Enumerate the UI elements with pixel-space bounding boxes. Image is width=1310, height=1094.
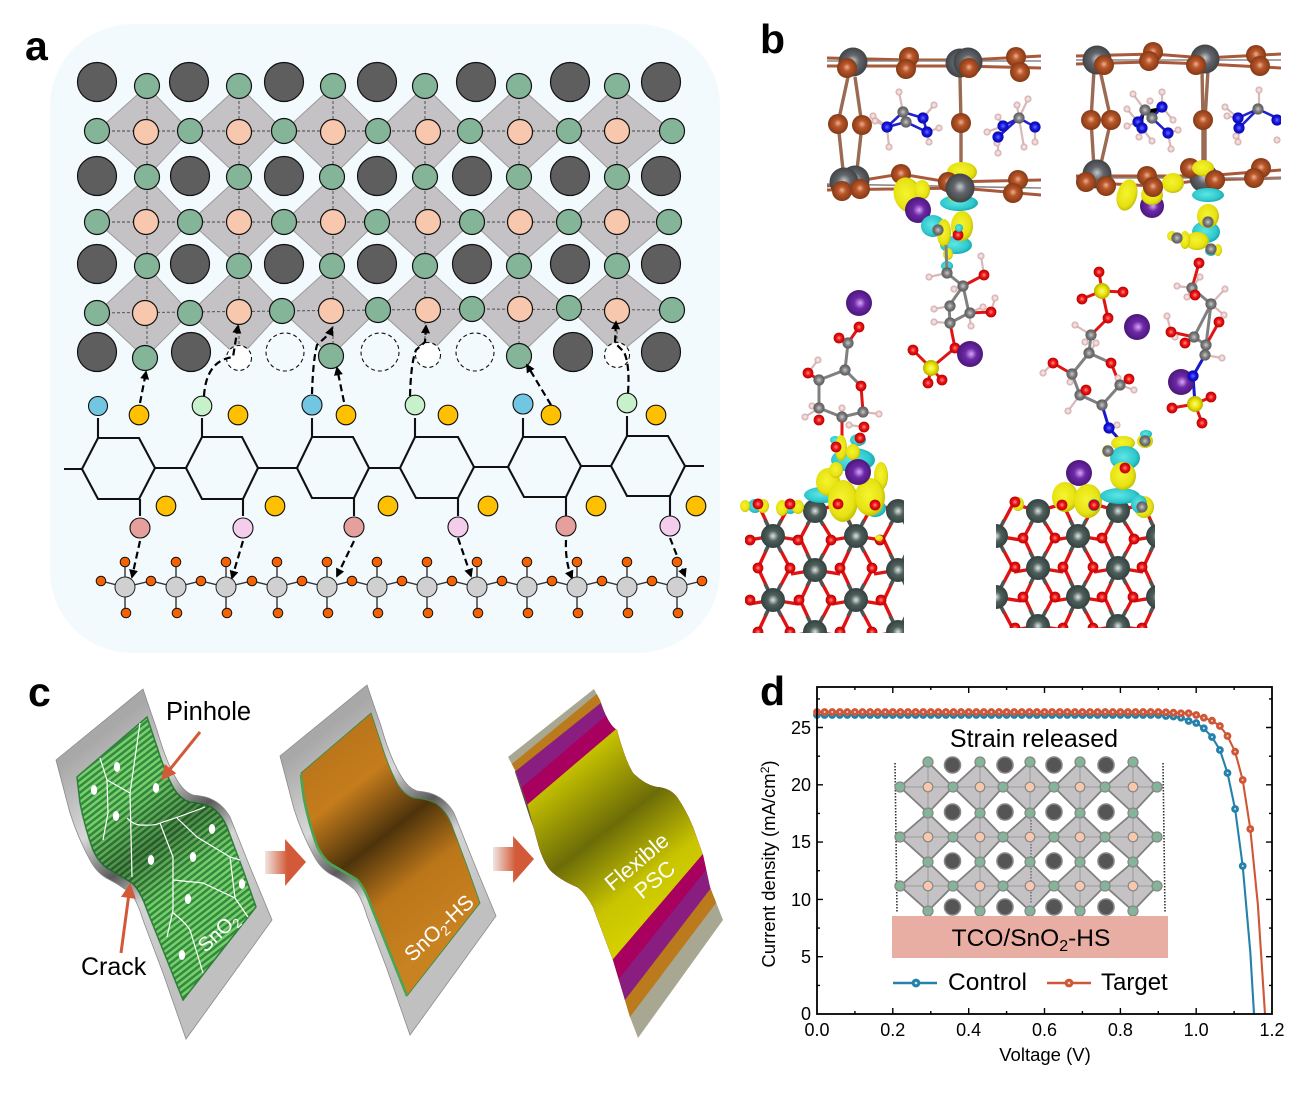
TCO/SnO2-HS layer	[892, 916, 1168, 958]
inset octahedra	[900, 762, 1157, 911]
film green edge	[301, 775, 407, 996]
crack callout	[81, 886, 147, 981]
hanging molecule in left model	[908, 245, 998, 388]
cracks	[100, 723, 248, 973]
plot frame and ticks	[817, 687, 1272, 1014]
x tick labels: 0.6	[1032, 1020, 1057, 1040]
right charge density, lower interface	[1010, 430, 1154, 518]
Target J-V curve	[817, 712, 1258, 905]
right SnO2 slab	[996, 496, 1155, 628]
block arrow 2	[493, 836, 534, 883]
left perovskite slab	[827, 47, 1041, 203]
left SnO2 slab	[745, 498, 904, 633]
ribbon 2: SnO2-HS on substrate	[280, 685, 496, 1035]
film shading	[77, 717, 256, 1000]
x tick labels: 1.0	[1184, 1020, 1209, 1040]
panel b: DFT charge density	[740, 16, 1283, 664]
dashed arrows: molecule to perovskite and SnO2	[132, 322, 685, 578]
TCO/SnO2-HS layer: TCO/SnO	[952, 925, 1059, 952]
legend: Target	[1047, 969, 1168, 996]
A-site and halide vacancies	[226, 333, 630, 371]
inset dotted guides	[895, 763, 1165, 912]
panel letter c: c	[28, 669, 51, 715]
x axis title: Voltage (V)	[999, 1044, 1091, 1065]
SnO2 chain tin atoms	[115, 577, 687, 597]
panel a: perovskite / SnO2 interface schematic	[25, 23, 720, 653]
substrate sheet	[280, 685, 496, 1035]
y axis title: Current density (mA/cm	[758, 773, 779, 968]
SnO2 label: SnO	[194, 914, 238, 957]
large dark A-site cations	[78, 62, 680, 372]
pinhole callout: Pinhole	[166, 698, 251, 726]
substrate sheet	[56, 689, 272, 1039]
x tick labels: 0.0	[804, 1020, 830, 1040]
SnO2-HS label: -HS	[436, 891, 479, 932]
Flexible label: Flexible	[600, 828, 674, 896]
SnO2 label: 2	[229, 915, 245, 931]
crack callout: Crack	[81, 953, 147, 981]
y tick labels: 20	[791, 775, 811, 795]
panel letter d: d	[760, 668, 785, 714]
Control J-V curve	[817, 715, 1250, 952]
y tick labels: 25	[791, 718, 811, 738]
right adsorbed molecule	[1040, 267, 1150, 438]
y axis title: 2	[758, 766, 772, 773]
x tick labels: 0.8	[1108, 1020, 1133, 1040]
orange B-site atoms	[132, 118, 630, 326]
SnO2-HS label: 2	[437, 922, 454, 939]
striped SnO2 film	[77, 717, 256, 1000]
SnO2 chain oxygen atoms	[96, 557, 707, 618]
ribbon 3: flexible PSC stack	[508, 689, 723, 1038]
inset dark cations	[944, 757, 1114, 915]
bottom functional groups	[130, 516, 680, 538]
inset center dotted line	[1030, 820, 1032, 903]
x tick labels: 0.2	[880, 1020, 905, 1040]
panel letter a: a	[25, 23, 49, 69]
layered stack	[508, 689, 723, 1038]
y tick labels: 15	[791, 832, 811, 852]
yellow counter cations	[129, 405, 706, 516]
y tick labels: 0	[801, 1004, 811, 1024]
left charge density, upper interface	[889, 162, 978, 271]
inset green atoms	[895, 757, 1162, 916]
green halide atoms	[84, 74, 684, 370]
x tick labels	[804, 1020, 1285, 1040]
y axis title: )	[758, 760, 779, 767]
perovskite octahedra	[97, 86, 672, 358]
SnO2-HS film	[301, 713, 480, 996]
hanging molecule in right model	[1164, 258, 1228, 428]
hexagon polymer chain	[64, 416, 704, 516]
inset title: Strain released	[950, 725, 1118, 753]
underside edge	[515, 770, 634, 1025]
panel a background	[50, 24, 720, 653]
SnO2 chain bonds	[101, 562, 702, 612]
y tick labels: 5	[801, 947, 811, 967]
pinholes	[91, 762, 245, 960]
top functional groups	[88, 393, 637, 416]
left adsorbed molecule	[802, 290, 882, 440]
y tick labels	[791, 718, 811, 1024]
panel d: J-V curves	[758, 668, 1285, 1065]
left charge density, lower interface	[740, 433, 888, 541]
inset: strain released lattice	[892, 725, 1168, 958]
block arrow 1	[265, 839, 306, 886]
Control curve end segment	[1250, 952, 1254, 1014]
legend: Control	[893, 969, 1027, 996]
right charge density, upper interface	[1113, 160, 1225, 256]
legend: Target: Target	[1101, 969, 1168, 996]
pinhole callout	[163, 698, 251, 778]
x tick labels: 1.2	[1259, 1020, 1285, 1040]
inset orange atoms	[923, 782, 1138, 891]
right perovskite slab	[1076, 42, 1283, 197]
ribbon 1: SnO2 on substrate	[56, 689, 272, 1039]
panel c: flexible device schematic	[30, 684, 723, 1040]
y tick labels: 10	[791, 890, 811, 910]
panel letter b: b	[760, 16, 785, 62]
x tick labels: 0.4	[956, 1020, 981, 1040]
PSC label: PSC	[629, 855, 680, 904]
TCO/SnO2-HS layer: 2	[1059, 938, 1068, 955]
Target curve end segment	[1258, 905, 1265, 1014]
TCO/SnO2-HS layer: -HS	[1068, 925, 1110, 952]
SnO2-HS label: SnO	[400, 921, 446, 966]
legend: Control: Control	[948, 969, 1027, 996]
